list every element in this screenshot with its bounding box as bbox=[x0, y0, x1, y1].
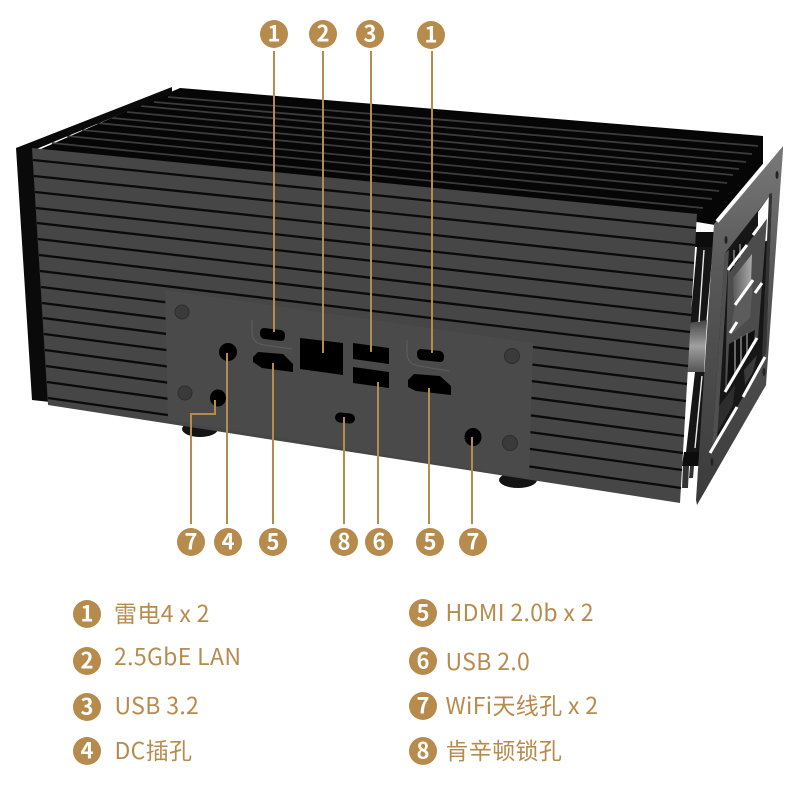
mini PC chassis bbox=[16, 87, 783, 505]
legend item 1: 雷电4 x 2 bbox=[114, 595, 210, 629]
legend item 2: 2 bbox=[81, 644, 93, 676]
legend item 2 bbox=[73, 638, 241, 676]
badge 4 bbox=[214, 524, 242, 556]
LAN port bbox=[300, 338, 343, 375]
badge 7 left: 7 bbox=[185, 524, 197, 556]
fin slits bbox=[33, 160, 696, 488]
badge 5 right bbox=[416, 524, 444, 556]
badge 5 right: 5 bbox=[424, 524, 436, 556]
legend item 4: DC插孔 bbox=[114, 732, 192, 766]
legend bbox=[73, 594, 598, 766]
badge 1: 1 bbox=[268, 16, 280, 48]
ports bbox=[210, 328, 482, 446]
legend item 6 bbox=[409, 643, 530, 677]
Thunderbolt port right bbox=[417, 349, 444, 362]
port bezels bbox=[252, 320, 449, 371]
legend item 6: USB 2.0 bbox=[446, 643, 530, 677]
lower opening brackets bbox=[744, 355, 757, 385]
legend item 5: HDMI 2.0b x 2 bbox=[446, 594, 594, 628]
badge 6 bbox=[365, 524, 393, 556]
antenna hole left bbox=[210, 390, 226, 406]
legend item 8: 8 bbox=[417, 734, 429, 766]
legend item 5: 5 bbox=[417, 596, 429, 628]
legend item 7: WiFi天线孔 x 2 bbox=[446, 687, 598, 721]
left rubber foot bbox=[182, 421, 218, 437]
legend item 3: USB 3.2 bbox=[114, 687, 199, 721]
badge 2 bbox=[309, 16, 337, 48]
badge 2: 2 bbox=[317, 16, 329, 48]
badge 5 left bbox=[259, 524, 287, 556]
DC jack bbox=[219, 343, 237, 361]
screws bbox=[175, 305, 520, 450]
inner block bbox=[731, 280, 753, 335]
left inner strip bbox=[712, 250, 729, 445]
badge 8 bbox=[330, 524, 358, 556]
legend item 3: 3 bbox=[81, 690, 93, 722]
badge 3 bbox=[356, 16, 384, 48]
badge 1 right bbox=[417, 18, 445, 50]
legend item 3 bbox=[73, 687, 199, 722]
leader lines bbox=[191, 51, 472, 524]
badge 7 right: 7 bbox=[467, 524, 479, 556]
USB port upper bbox=[353, 343, 389, 364]
antenna hole right bbox=[464, 428, 482, 446]
legend item 4: 4 bbox=[81, 734, 94, 766]
Kensington lock slot bbox=[335, 412, 355, 424]
inner window bbox=[733, 254, 752, 304]
plate body bbox=[696, 143, 783, 505]
HDMI port right bbox=[408, 374, 451, 395]
badge 5 left: 5 bbox=[267, 524, 279, 556]
badge 1 right: 1 bbox=[425, 18, 437, 50]
badge 7 left bbox=[177, 524, 205, 556]
rear fin ends and standoffs bbox=[682, 232, 714, 488]
badge 6: 6 bbox=[373, 524, 386, 556]
rear I/O panel bbox=[165, 290, 533, 478]
legend item 8: 肯辛顿锁孔 bbox=[446, 732, 562, 766]
bottom callout badges bbox=[177, 524, 487, 556]
Thunderbolt port left bbox=[260, 328, 285, 341]
legend item 1: 1 bbox=[81, 596, 93, 628]
right strip inner wall bbox=[762, 193, 772, 358]
badge 8: 8 bbox=[338, 524, 350, 556]
right rubber foot bbox=[499, 472, 537, 488]
legend item 7: 7 bbox=[417, 688, 429, 720]
top callout badges bbox=[260, 16, 445, 50]
left side plate bbox=[16, 87, 172, 402]
inner plate bbox=[725, 218, 767, 392]
legend item 2: 2.5GbE LAN bbox=[114, 638, 241, 672]
badge 3: 3 bbox=[364, 16, 376, 48]
top fins bbox=[34, 88, 763, 225]
front finned face bbox=[32, 148, 697, 503]
HDMI port left bbox=[253, 352, 293, 372]
badge 1 bbox=[260, 16, 288, 48]
white edges bbox=[710, 143, 783, 453]
plate opening bbox=[712, 193, 772, 445]
USB port lower bbox=[353, 367, 389, 388]
badge 4: 4 bbox=[222, 524, 235, 556]
legend item 6: 6 bbox=[417, 644, 430, 676]
badge 7 right bbox=[459, 524, 487, 556]
right mounting plate bbox=[696, 143, 783, 505]
legend item 4 bbox=[73, 732, 192, 766]
fin slots in opening bbox=[727, 240, 755, 385]
